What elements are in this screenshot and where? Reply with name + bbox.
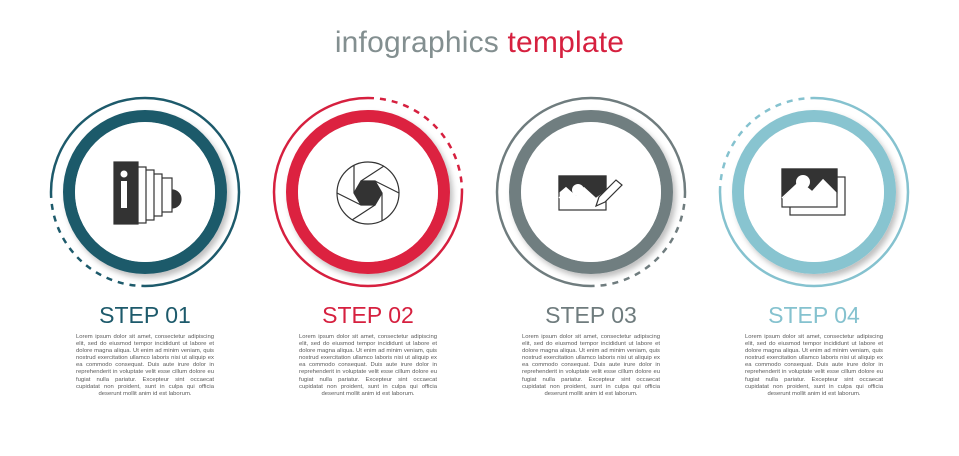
icon: aperture bbox=[337, 162, 399, 224]
step 4 circle bbox=[720, 98, 908, 286]
step 4 heading: STEP 04 bbox=[768, 302, 860, 328]
title: infographics template bbox=[335, 26, 624, 59]
icon: image edit bbox=[559, 176, 622, 210]
step 1 text: Lorem ipsum dolor sit amet, consectetur adipiscing elit, sed do eiusmod tempor incididunt ut labore et dolore magna aliqua. Ut enim ad minim veniam, quis nostrud exercitation ullamco laboris nisi ut aliquip ex ea commodo consequat. Duis aute irure dolor in reprehenderit in voluptate velit esse cillum dolore eu fugiat nulla pariatur. Excepteur sint occaecat cupidatat non proident, sunt in culpa qui officia deserunt mollit anim id est laborum. bbox=[76, 334, 214, 397]
step 4 text: Lorem ipsum dolor sit amet, consectetur adipiscing elit, sed do eiusmod tempor incididunt ut labore et dolore magna aliqua. Ut enim ad minim veniam, quis nostrud exercitation ullamco laboris nisi ut aliquip ex ea commodo consequat. Duis aute irure dolor in reprehenderit in voluptate velit esse cillum dolore eu fugiat nulla pariatur. Excepteur sint occaecat cupidatat non proident, sunt in culpa qui officia deserunt mollit anim id est laborum. bbox=[745, 334, 883, 397]
step 2 heading: STEP 02 bbox=[322, 302, 414, 328]
step 2 text: Lorem ipsum dolor sit amet, consectetur adipiscing elit, sed do eiusmod tempor incididunt ut labore et dolore magna aliqua. Ut enim ad minim veniam, quis nostrud exercitation ullamco laboris nisi ut aliquip ex ea commodo consequat. Duis aute irure dolor in reprehenderit in voluptate velit esse cillum dolore eu fugiat nulla pariatur. Excepteur sint occaecat cupidatat non proident, sunt in culpa qui officia deserunt mollit anim id est laborum. bbox=[299, 334, 437, 397]
step 3 text: Lorem ipsum dolor sit amet, consectetur adipiscing elit, sed do eiusmod tempor incididunt ut labore et dolore magna aliqua. Ut enim ad minim veniam, quis nostrud exercitation ullamco laboris nisi ut aliquip ex ea commodo consequat. Duis aute irure dolor in reprehenderit in voluptate velit esse cillum dolore eu fugiat nulla pariatur. Excepteur sint occaecat cupidatat non proident, sunt in culpa qui officia deserunt mollit anim id est laborum. bbox=[522, 334, 660, 397]
step 1 heading: STEP 01 bbox=[99, 302, 191, 328]
step 3 heading: STEP 03 bbox=[545, 302, 637, 328]
step 2 circle bbox=[274, 98, 462, 286]
icon: info camera bbox=[114, 162, 181, 224]
step circles bbox=[50, 96, 910, 288]
step 3 circle bbox=[497, 98, 685, 286]
icon: images bbox=[782, 169, 845, 215]
step 1 circle bbox=[51, 98, 239, 286]
